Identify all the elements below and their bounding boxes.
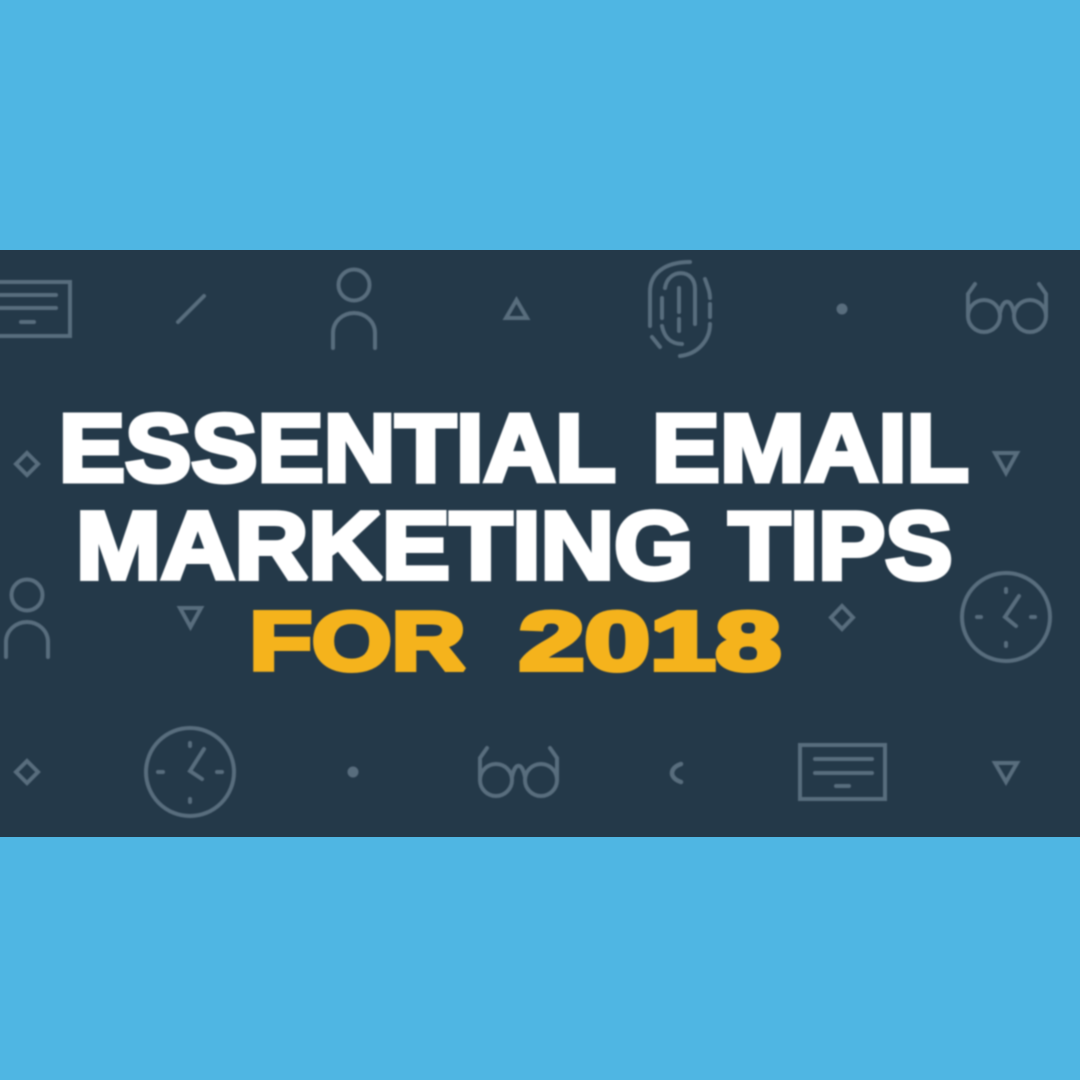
- icon: card top left: [0, 282, 70, 336]
- heading line 2: TIPS: [728, 492, 952, 600]
- icon: diamond right: [831, 606, 853, 629]
- heading line 1: ESSENTIAL: [59, 395, 616, 502]
- icon: dot bottom: [348, 768, 358, 776]
- heading line 1: [59, 395, 969, 502]
- heading line 2: MARKETING: [76, 492, 694, 600]
- icon: glasses top: [968, 284, 1046, 332]
- heading line 2: [76, 492, 952, 600]
- icon: glasses bottom: [480, 748, 557, 796]
- icon: diamond bottom left: [16, 761, 38, 783]
- icon: triangle up: [506, 300, 527, 318]
- icon: dot top: [838, 304, 846, 314]
- icon: card bottom: [800, 745, 885, 799]
- icon: person top: [333, 270, 375, 348]
- icon: triangle down right: [995, 453, 1017, 473]
- heading line 3: 2018: [519, 594, 781, 688]
- icon: slash: [178, 296, 204, 322]
- heading line 1: EMAIL: [652, 395, 969, 502]
- icon: person left: [6, 580, 48, 657]
- icon: triangle down left: [180, 608, 201, 627]
- icon: triangle down bottom: [995, 763, 1017, 782]
- dark banner panel: [0, 250, 1080, 837]
- background icon pattern: [0, 262, 1050, 816]
- title: [59, 395, 969, 688]
- icon: fingerprint: [650, 262, 710, 356]
- icon: clock bottom: [146, 728, 234, 816]
- icon: clock right: [962, 573, 1050, 661]
- heading line 3: [250, 594, 781, 688]
- icon: crescent: [672, 764, 681, 782]
- heading line 3: FOR: [250, 594, 466, 688]
- icon: diamond left: [16, 453, 38, 475]
